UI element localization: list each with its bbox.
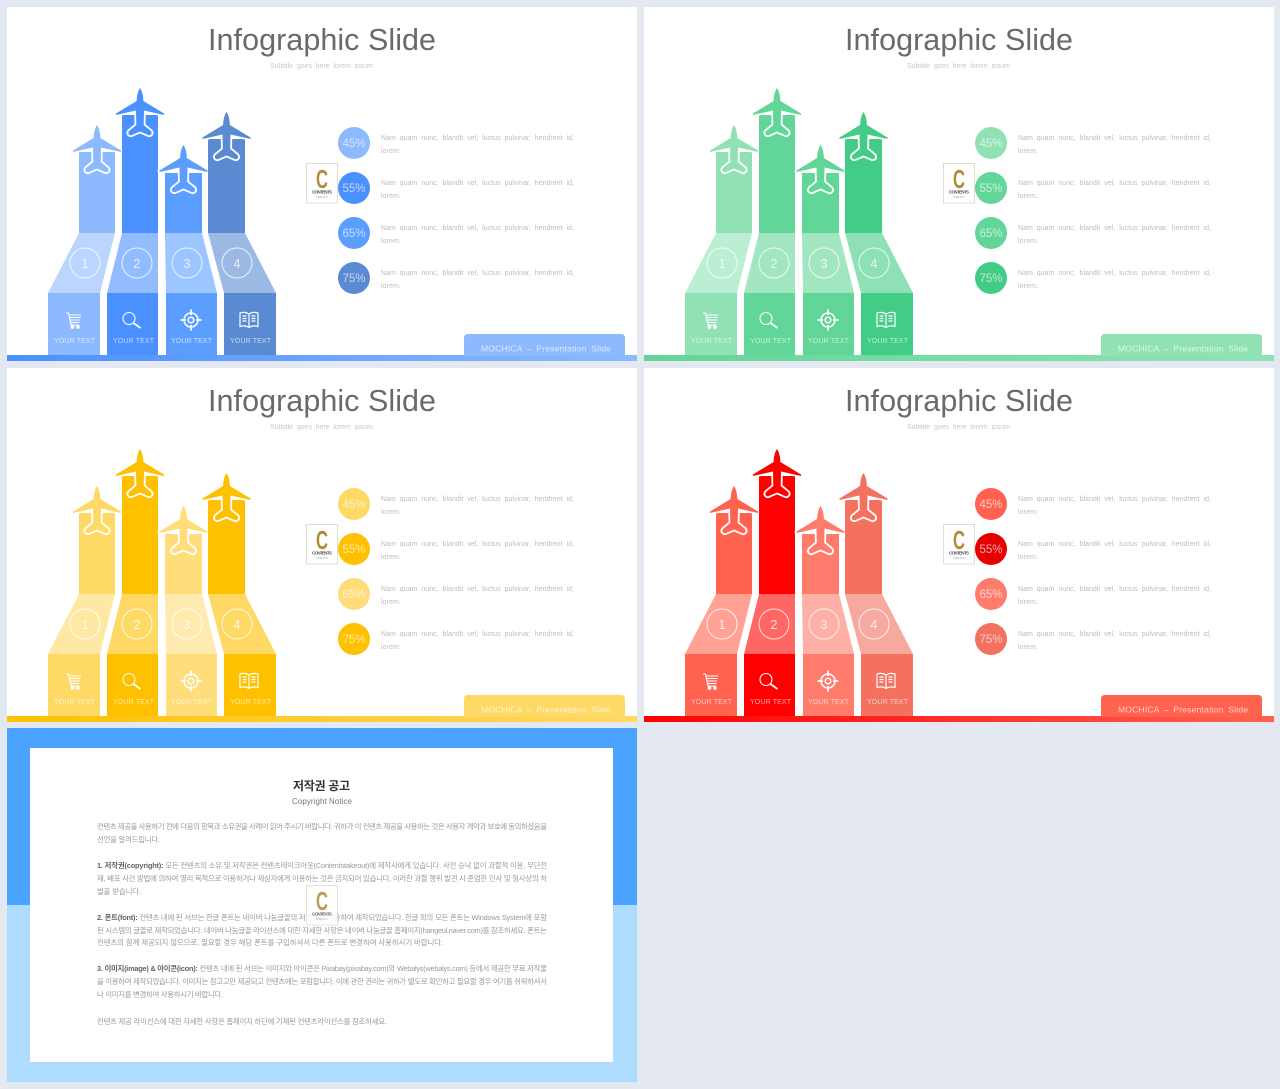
legend 75% <box>338 262 574 294</box>
column 2: YOUR TEXT <box>750 338 792 345</box>
column 2: YOUR TEXT <box>113 699 155 706</box>
legend 65% <box>338 578 574 610</box>
column 1: YOUR TEXT <box>691 338 733 345</box>
logo: C <box>316 886 328 916</box>
subtitle: Subtitle goes here lorem ipsum <box>907 63 1010 70</box>
legend 45%: Nam quam nunc, blandit vel, luctus pulvinar, hendrerit id, <box>381 135 574 142</box>
legend 45%: lorem. <box>381 148 401 155</box>
column 2: YOUR TEXT <box>750 699 792 706</box>
footer tab: MOCHICA – Presentation Slide <box>1118 344 1248 354</box>
column 3: 3 <box>821 618 828 632</box>
logo: C <box>316 164 328 194</box>
legend 75%: 75% <box>342 273 366 285</box>
legend 65%: 65% <box>342 589 366 601</box>
column 4 <box>840 112 913 355</box>
column 2 <box>107 88 164 355</box>
title: Infographic Slide <box>845 384 1073 418</box>
legend 45%: 45% <box>979 499 1003 511</box>
column 1 <box>48 486 121 716</box>
bottom bar <box>7 716 637 722</box>
logo: TAKE OUT <box>316 917 328 921</box>
legend 75%: 75% <box>342 634 366 646</box>
footer tab: MOCHICA – Presentation Slide <box>481 344 611 354</box>
legend 75%: lorem. <box>1018 644 1038 651</box>
column 4: YOUR TEXT <box>230 338 272 345</box>
legend 45%: 45% <box>342 499 366 511</box>
legend 45%: lorem. <box>1018 148 1038 155</box>
column 3 <box>160 506 217 716</box>
legend 55%: Nam quam nunc, blandit vel, luctus pulvinar, hendrerit id, <box>381 180 574 187</box>
column 3: 3 <box>821 257 828 271</box>
legend 75%: lorem. <box>381 644 401 651</box>
legend 75%: 75% <box>979 273 1003 285</box>
column 3: YOUR TEXT <box>171 699 213 706</box>
column 2: 2 <box>771 257 778 271</box>
column 3: 3 <box>184 618 191 632</box>
logo: CONTENTS <box>312 190 332 194</box>
title: Infographic Slide <box>208 23 436 57</box>
column 1: 1 <box>82 257 89 271</box>
section 2: font <box>97 913 547 947</box>
legend 55% <box>338 533 574 565</box>
legend 75% <box>338 623 574 655</box>
column 4: 4 <box>234 257 241 271</box>
section 2: font: 컨텐츠의 함께 제공되지 않으므로, 필요할 경우 해당 폰트를 구입하셔서 다른 폰트로 변경하여 사용하시기 바랍니다. <box>97 938 443 947</box>
column 3: YOUR TEXT <box>808 338 850 345</box>
subtitle: Subtitle goes here lorem ipsum <box>270 424 373 431</box>
intro text <box>97 822 547 844</box>
section 3: image and icon: 나 이미지를 변경하여 사용하시기 바랍니다. <box>97 990 223 999</box>
intro text: 컨텐츠 제공을 사용하기 전에 다음의 항목과 소유권을 사례이 읽어 주시기 바랍니다. 귀하가 이 컨텐츠 제공을 사용하는 것은 사용자 계약과 보호에 동의하셨음을 <box>97 822 547 831</box>
legend 45% <box>338 488 574 520</box>
column 2: 2 <box>771 618 778 632</box>
legend 45%: Nam quam nunc, blandit vel, luctus pulvinar, hendrerit id, <box>381 496 574 503</box>
legend 45%: 45% <box>979 138 1003 150</box>
column 4: YOUR TEXT <box>867 699 909 706</box>
bottom bar <box>7 355 637 361</box>
footer tab: MOCHICA – Presentation Slide <box>1118 704 1248 714</box>
section 1: copyright: 재, 배포 사건 방법에 의하여 영리 목적으로 이용하거나 제삼자에게 이용하는 것은 금지되어 있습니다. 이러한 과할 행위 발견 시 준엄한 민사 및 형사상의 처 <box>97 874 547 883</box>
logo <box>944 524 974 564</box>
legend 75%: 75% <box>979 634 1003 646</box>
title: Infographic Slide <box>208 384 436 418</box>
column 1: 1 <box>82 618 89 632</box>
legend 55%: Nam quam nunc, blandit vel, luctus pulvinar, hendrerit id, <box>1018 180 1211 187</box>
column 4: YOUR TEXT <box>230 699 272 706</box>
legend 65% <box>338 217 574 249</box>
section 3: image and icon <box>97 964 547 999</box>
legend 55%: 55% <box>979 544 1003 556</box>
legend 55%: lorem. <box>1018 193 1038 200</box>
column 3 <box>160 145 217 355</box>
logo <box>306 164 338 203</box>
section 2: font: 된 시스템의 글꼴로 제작되었습니다. 네이버 나눔글꼴 라이선스에 대한 자세한 사항은 네이버 나눔글꼴 홈페이지(hangeul.naver.com)를 참조하세요. 폰트는 <box>97 926 547 935</box>
column 4 <box>202 473 276 716</box>
legend 45%: lorem. <box>1018 509 1038 516</box>
legend 75%: Nam quam nunc, blandit vel, luctus pulvinar, hendrerit id, <box>381 270 574 277</box>
panel: red slide <box>644 368 1274 722</box>
logo: CONTENTS <box>949 190 969 194</box>
logo: TAKE OUT <box>316 556 328 560</box>
column 1: YOUR TEXT <box>54 699 96 706</box>
column 3: YOUR TEXT <box>808 699 850 706</box>
legend 55%: lorem. <box>1018 554 1038 561</box>
legend 45%: Nam quam nunc, blandit vel, luctus pulvinar, hendrerit id, <box>1018 496 1211 503</box>
legend 75%: Nam quam nunc, blandit vel, luctus pulvinar, hendrerit id, <box>381 631 574 638</box>
column 2 <box>744 449 801 716</box>
subtitle: Subtitle goes here lorem ipsum <box>270 63 373 70</box>
legend 45%: lorem. <box>381 509 401 516</box>
legend 65%: Nam quam nunc, blandit vel, luctus pulvinar, hendrerit id, <box>381 225 574 232</box>
section 1: copyright: 1. 저작권(copyright): 모든 컨텐츠의 소유 및 저작권은 컨텐츠테이크아웃(Contentstakeout)에 제작사에게 있습니다. 사전 승낙 없이 과할적 이용, 무단전 <box>97 861 547 870</box>
logo: CONTENTS <box>949 550 969 556</box>
column 2 <box>107 449 164 716</box>
legend 45%: Nam quam nunc, blandit vel, luctus pulvinar, hendrerit id, <box>1018 135 1211 142</box>
legend 55%: 55% <box>342 183 366 195</box>
footer tab <box>1101 695 1262 717</box>
logo: C <box>953 525 965 555</box>
legend 55%: 55% <box>979 183 1003 195</box>
footer tab <box>464 695 625 717</box>
legend 75% <box>975 623 1211 655</box>
logo: CONTENTS <box>312 912 332 916</box>
legend 65% <box>975 578 1211 610</box>
column 4: YOUR TEXT <box>867 338 909 345</box>
column 1: YOUR TEXT <box>691 699 733 706</box>
logo <box>944 164 974 203</box>
legend 65%: Nam quam nunc, blandit vel, luctus pulvinar, hendrerit id, <box>1018 225 1211 232</box>
footer tab <box>464 334 625 356</box>
legend 45%: 45% <box>342 138 366 150</box>
legend 65%: Nam quam nunc, blandit vel, luctus pulvinar, hendrerit id, <box>1018 586 1211 593</box>
column 2: 2 <box>134 257 141 271</box>
section 1: copyright: 벌을 받습니다. <box>97 887 141 896</box>
panel: blue slide <box>7 7 637 361</box>
column 4: 4 <box>871 257 878 271</box>
footer tab <box>1101 334 1262 356</box>
panel: green slide <box>644 7 1274 361</box>
legend 55% <box>975 533 1211 565</box>
section 3: image and icon: 을 이용하여 제작되었습니다. 이미지는 참고고만 제공되고 컨텐츠에는 포함합니다. 이에 관한 권리는 귀하가 별도로 확인하고 필요할 경우 여기를 쉬워하셔서 <box>97 977 547 986</box>
panel: yellow slide <box>7 368 637 722</box>
subtitle: Subtitle goes here lorem ipsum <box>907 424 1010 431</box>
section 1: copyright <box>97 861 547 896</box>
column 4 <box>202 112 276 355</box>
column 2 <box>744 88 801 355</box>
column 4: 4 <box>234 618 241 632</box>
section 2: font: 2. 폰트(font): 컨텐츠 내에 된 서브는 한글 폰트는 네이버 나눔글꼴의 저작물을 이용하여 제작되었습니다. 한글 외의 모든 폰트는 Windows System에 포함 <box>97 913 547 922</box>
sub-heading: Copyright Notice <box>292 797 353 806</box>
column 2: 2 <box>134 618 141 632</box>
column 2: YOUR TEXT <box>113 338 155 345</box>
legend 75%: Nam quam nunc, blandit vel, luctus pulvinar, hendrerit id, <box>1018 631 1211 638</box>
legend 45% <box>975 127 1211 159</box>
logo: C <box>316 525 328 555</box>
column 4: 4 <box>871 618 878 632</box>
column 4 <box>840 473 913 716</box>
legend 55%: lorem. <box>381 193 401 200</box>
legend 65%: 65% <box>342 228 366 240</box>
legend 45% <box>975 488 1211 520</box>
column 1 <box>685 125 758 355</box>
legend 65%: lorem. <box>1018 599 1038 606</box>
legend 75%: Nam quam nunc, blandit vel, luctus pulvinar, hendrerit id, <box>1018 270 1211 277</box>
legend 65%: Nam quam nunc, blandit vel, luctus pulvinar, hendrerit id, <box>381 586 574 593</box>
legend 55%: lorem. <box>381 554 401 561</box>
legend 55%: Nam quam nunc, blandit vel, luctus pulvinar, hendrerit id, <box>381 541 574 548</box>
column 1 <box>685 486 758 716</box>
section 3: image and icon: 3. 이미지(image) & 아이콘(icon): 컨텐츠 내에 된 서브는 이미지와 아이콘은 Pixabay(pixabay.com)와 Webalys(webalys.com) 등에서 제공한 무료 저작물 <box>97 964 547 973</box>
legend 55% <box>975 172 1211 204</box>
legend 55% <box>338 172 574 204</box>
panel: copyright notice <box>7 728 637 1082</box>
legend 75%: lorem. <box>1018 283 1038 290</box>
logo: TAKE OUT <box>316 195 328 199</box>
logo <box>306 524 338 564</box>
legend 45% <box>338 127 574 159</box>
intro text: 선언을 알려드립니다. <box>97 835 160 844</box>
legend 65%: 65% <box>979 589 1003 601</box>
legend 65%: lorem. <box>1018 238 1038 245</box>
bottom bar <box>644 716 1274 722</box>
legend 65%: 65% <box>979 228 1003 240</box>
column 3 <box>796 145 854 355</box>
column 3: YOUR TEXT <box>171 338 213 345</box>
logo: TAKE OUT <box>953 195 965 199</box>
column 3 <box>796 506 854 716</box>
column 1: YOUR TEXT <box>54 338 96 345</box>
legend 55%: Nam quam nunc, blandit vel, luctus pulvinar, hendrerit id, <box>1018 541 1211 548</box>
legend 75%: lorem. <box>381 283 401 290</box>
legend 75% <box>975 262 1211 294</box>
column 1: 1 <box>719 257 726 271</box>
logo: CONTENTS <box>312 550 332 556</box>
heading: 저작권 공고 <box>293 778 350 793</box>
legend 65% <box>975 217 1211 249</box>
logo: TAKE OUT <box>953 556 965 560</box>
column 3: 3 <box>184 257 191 271</box>
legend 55%: 55% <box>342 544 366 556</box>
title: Infographic Slide <box>845 23 1073 57</box>
footer tab: MOCHICA – Presentation Slide <box>481 704 611 714</box>
legend 65%: lorem. <box>381 599 401 606</box>
column 1: 1 <box>719 618 726 632</box>
license note: 컨텐츠 제공 라이선스에 대한 자세한 사항은 홈페이지 하단에 기재된 컨텐츠라이선스를 참조하세요. <box>97 1017 387 1026</box>
logo <box>306 886 338 925</box>
logo: C <box>953 164 965 194</box>
column 1 <box>48 125 121 355</box>
bottom bar <box>644 355 1274 361</box>
legend 65%: lorem. <box>381 238 401 245</box>
